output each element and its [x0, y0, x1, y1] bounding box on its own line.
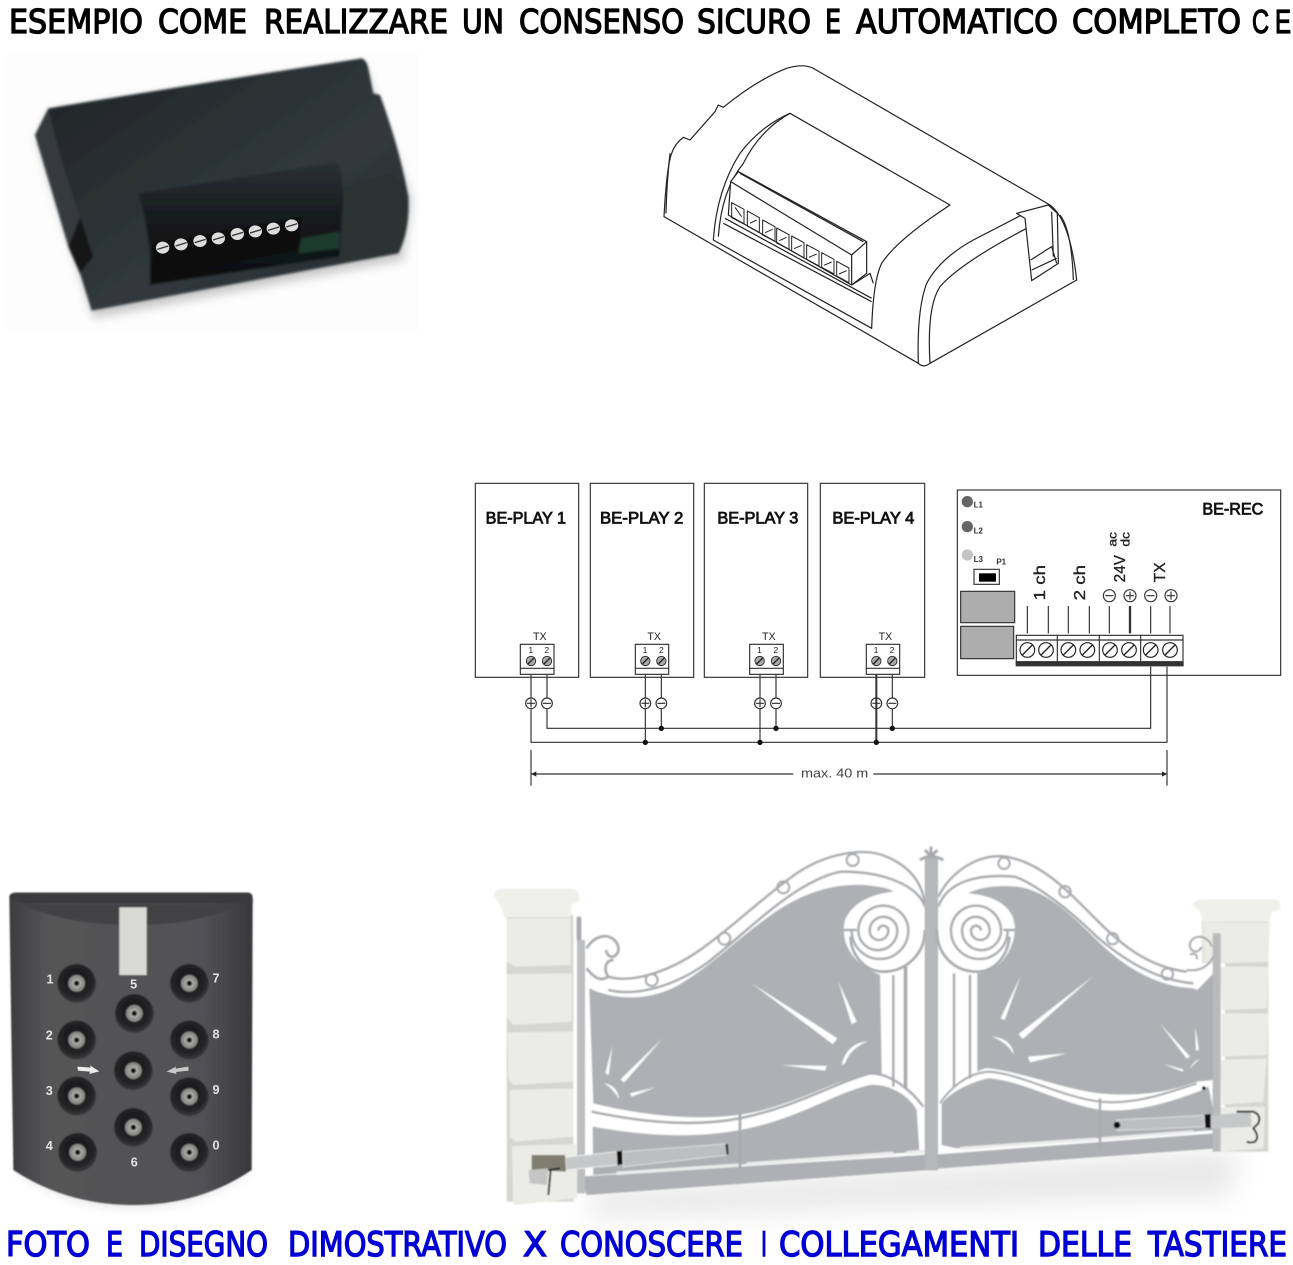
BE-PLAY 2 box: TX — [647, 631, 661, 643]
wiring diagram: BE-REC receiver — [957, 490, 1281, 675]
title: ESEMPIO — [9, 2, 143, 41]
keypad numbers: 7 — [212, 972, 220, 986]
footer caption: COLLEGAMENTI — [779, 1225, 1019, 1265]
title: CONSENSO — [519, 2, 684, 41]
left gate panels — [580, 885, 928, 1195]
left gate frame and scrollwork — [579, 852, 932, 1193]
bus wires — [526, 667, 1167, 745]
right gate rays — [992, 976, 1200, 1072]
photo: gate ground shadow — [590, 1150, 1240, 1218]
BE-PLAY 1 box: 2 — [544, 645, 549, 655]
LEDs: L2 — [974, 526, 984, 535]
right gate panels — [900, 886, 1217, 1171]
P1 switch — [974, 569, 999, 584]
left gate rays — [604, 982, 868, 1099]
title: UN — [462, 2, 504, 41]
right gate frame and scrollwork — [905, 847, 1217, 1170]
title: REALIZZARE — [264, 2, 448, 41]
keypad numbers: 5 — [130, 978, 137, 992]
keypad numbers: 1 — [46, 972, 54, 986]
BE-PLAY 3 box: BE-PLAY 3 — [717, 509, 798, 527]
footer caption: DELLE — [1038, 1225, 1132, 1265]
BE-PLAY 4 box: BE-PLAY 4 — [832, 509, 914, 527]
keypad numbers: 3 — [46, 1084, 53, 1098]
footer caption: E — [106, 1225, 123, 1265]
title: COMPLETO — [1072, 2, 1241, 41]
photo: receiver BE-REC black box — [7, 52, 418, 333]
photo: gate right half — [900, 847, 1280, 1171]
right pillar — [1193, 899, 1280, 1152]
photo: gate left half — [493, 852, 932, 1205]
channel labels: TX — [1152, 562, 1169, 582]
left operator arm — [528, 1144, 729, 1195]
channel labels — [1032, 532, 1169, 600]
BE-PLAY 4 box: 2 — [890, 645, 895, 655]
channel labels: 1 ch — [1032, 565, 1049, 600]
LEDs: L1 — [974, 500, 984, 509]
BE-PLAY 2 box — [590, 483, 694, 677]
title: E — [825, 2, 841, 41]
CE mark: C — [1252, 3, 1269, 40]
keypad numbers: 0 — [212, 1138, 220, 1152]
footer caption: X — [523, 1225, 547, 1265]
BE-PLAY 1 box — [475, 483, 579, 677]
CE mark — [1252, 3, 1291, 40]
dimension: max. 40 m — [531, 750, 1167, 786]
channel labels: 24V — [1112, 554, 1129, 582]
terminal block — [1016, 635, 1183, 666]
title: SICURO — [697, 2, 811, 41]
BE-PLAY 2 box: 1 — [643, 645, 648, 655]
BE-PLAY 3 box: TX — [762, 631, 776, 643]
keypad numbers: 6 — [131, 1156, 138, 1170]
dimension: max. 40 m: max. 40 m — [801, 767, 868, 781]
LEDs: P1 — [996, 557, 1007, 566]
right operator arm — [1114, 1087, 1259, 1142]
BE-PLAY 3 box: 1 — [757, 645, 762, 655]
wiring diagram: BE-PLAY keypads — [475, 483, 1167, 786]
input wires — [1027, 606, 1170, 633]
LEDs — [962, 496, 1007, 566]
LEDs: L3 — [974, 555, 984, 564]
channel labels: dc — [1118, 532, 1132, 547]
footer caption: CONOSCERE — [560, 1225, 743, 1265]
BE-PLAY 2 box: 2 — [659, 645, 664, 655]
BE-PLAY 4 box: 1 — [874, 645, 879, 655]
relays — [961, 591, 1015, 659]
polarity symbols — [1103, 590, 1177, 602]
BE-PLAY 1 box: TX — [533, 631, 547, 643]
keypad numbers: 4 — [46, 1139, 53, 1153]
title — [9, 2, 1241, 41]
photo: BE-PLAY keypad — [9, 893, 253, 1208]
BE-PLAY 3 box — [704, 483, 808, 677]
keypad numbers: 8 — [212, 1028, 220, 1042]
footer caption — [6, 1225, 1287, 1265]
title: AUTOMATICO — [856, 2, 1058, 41]
wiring diagram: BE-REC receiver: BE-REC — [1202, 500, 1264, 518]
footer caption: DISEGNO — [139, 1225, 268, 1265]
BE-PLAY 1 box: BE-PLAY 1 — [486, 509, 566, 527]
title: COME — [158, 2, 247, 41]
keypad numbers: 9 — [212, 1083, 220, 1097]
BE-PLAY 2 box: BE-PLAY 2 — [600, 509, 683, 527]
keypad arrows — [77, 1065, 189, 1074]
footer caption: I — [761, 1225, 767, 1265]
footer caption: DIMOSTRATIVO — [288, 1225, 507, 1265]
BE-PLAY 4 box: TX — [879, 631, 892, 643]
channel labels: ac — [1106, 532, 1120, 547]
keypad numbers: 2 — [46, 1028, 53, 1042]
BE-PLAY 1 box: 1 — [528, 645, 533, 655]
channel labels: 2 ch — [1072, 565, 1089, 600]
keypad numbers — [46, 972, 220, 1170]
footer caption: FOTO — [6, 1225, 90, 1265]
left pillar — [493, 888, 579, 1205]
BE-PLAY 4 box — [820, 483, 925, 677]
keypad buttons — [57, 964, 209, 1172]
BE-PLAY 3 box: 2 — [773, 645, 778, 655]
line drawing: receiver box — [664, 66, 1077, 366]
